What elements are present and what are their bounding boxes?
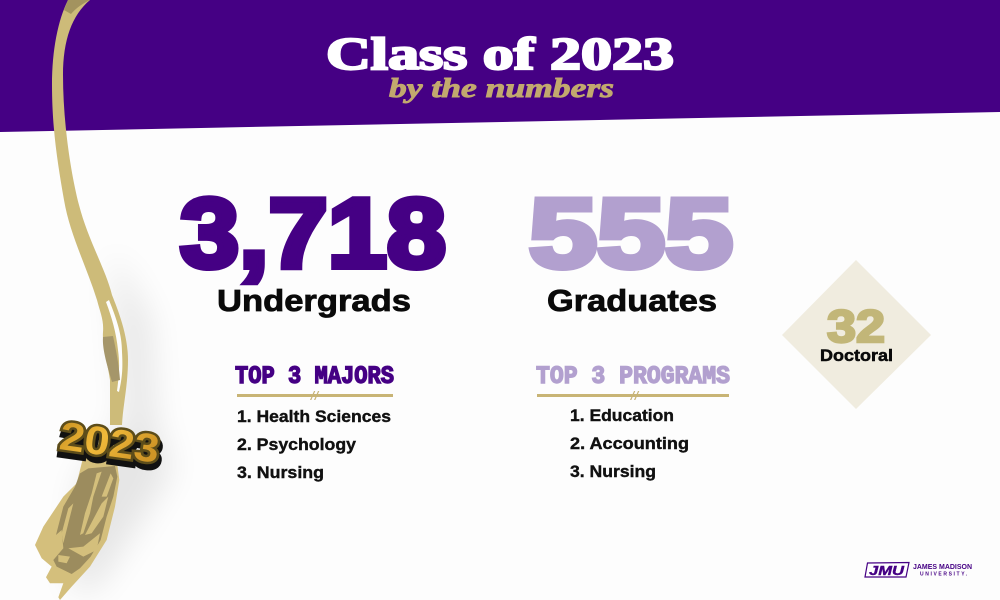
panel: doctoral diamond — [782, 260, 931, 409]
header band — [0, 0, 1000, 132]
fringe body — [35, 457, 119, 600]
stat: graduates label: Graduates — [547, 283, 717, 318]
programs list: 1. Education — [570, 406, 674, 425]
logo letters: JMU — [869, 563, 905, 578]
stat: undergrads label: Undergrads — [217, 283, 411, 318]
panel: top 3 majors — [235, 362, 394, 482]
programs list: 2. Accounting — [570, 434, 689, 453]
logo badge — [865, 562, 909, 577]
title: Class of 2023 — [326, 28, 674, 79]
stat: graduates number: 555 — [529, 178, 733, 288]
charm: 2023: 2023 — [57, 414, 162, 472]
logo: JMU — [865, 562, 972, 578]
diamond shape — [782, 260, 931, 409]
programs divider — [537, 391, 729, 400]
majors heading: TOP 3 MAJORS — [235, 362, 394, 391]
panel: top 3 programs — [536, 362, 730, 481]
fringe shading — [53, 466, 117, 574]
majors list: 1. Health Sciences — [237, 407, 391, 426]
charm: 2023: 2023 — [58, 419, 163, 477]
cord slit — [106, 300, 122, 392]
subtitle: by the numbers — [389, 73, 614, 103]
stat: undergrads number: 3,718 — [180, 178, 446, 288]
logo university: UNIVERSITY. — [920, 572, 968, 578]
programs heading: TOP 3 PROGRAMS — [536, 362, 730, 391]
tassel fringe — [35, 457, 119, 600]
cord top shade — [64, 0, 90, 14]
cord dark patch — [103, 336, 120, 382]
doctoral number: 32 — [827, 301, 885, 352]
programs list — [570, 406, 689, 481]
majors divider — [237, 391, 393, 400]
majors list: 3. Nursing — [237, 463, 324, 482]
tassel — [35, 0, 172, 600]
fringe light streaks — [58, 472, 113, 563]
tassel shadow — [70, 250, 172, 590]
majors list: 2. Psychology — [237, 435, 357, 454]
programs list: 3. Nursing — [570, 462, 656, 481]
doctoral label: Doctoral — [820, 347, 893, 365]
tassel cord — [52, 0, 128, 425]
majors list — [237, 407, 391, 482]
logo wordmark: JAMES MADISON — [913, 562, 972, 571]
